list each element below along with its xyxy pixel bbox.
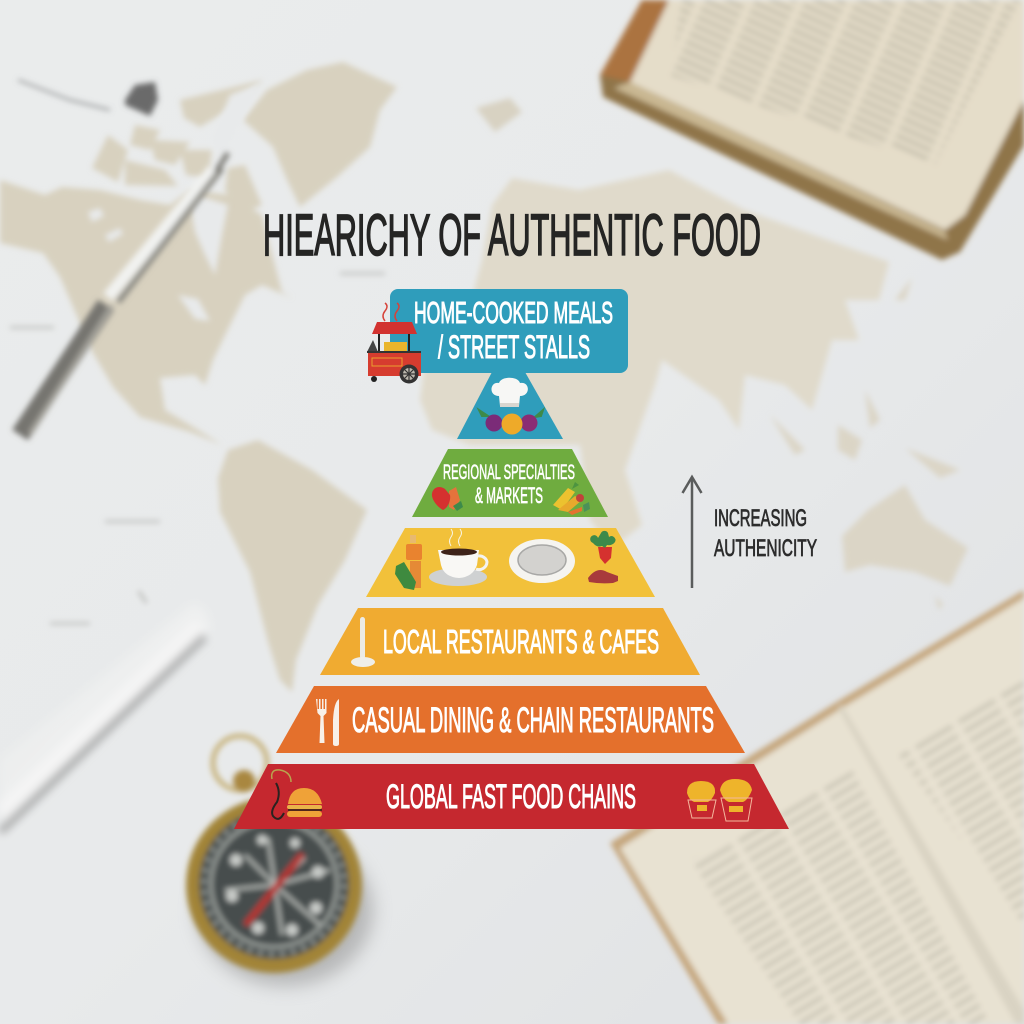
tier 3: yellow illustration band [366, 528, 655, 597]
icon: vegetables [479, 410, 543, 434]
pyramid [234, 289, 789, 829]
tier 2: regional specialties: & MARKETS [475, 483, 543, 508]
icon: fruit [432, 487, 463, 511]
South America [218, 440, 367, 692]
Asian islands [770, 278, 960, 478]
icon: bottle and greens [395, 535, 422, 590]
icon: vegetable bundle [553, 482, 590, 515]
top tier banner [390, 289, 628, 373]
Greenland [243, 62, 397, 207]
Australia [842, 485, 968, 586]
Baffin island [225, 165, 262, 215]
icon: hook [272, 770, 291, 819]
tier 6: global fast food: GLOBAL FAST FOOD CHAINS [386, 778, 636, 816]
paper roll [0, 604, 210, 838]
Eurasia and Africa [420, 170, 889, 548]
world map [0, 62, 968, 692]
Arctic islands [180, 80, 263, 127]
arrow: increasing authenticity [682, 477, 702, 588]
icon: plate [509, 539, 575, 583]
label: increasing authenticity: INCREASING [714, 505, 807, 532]
tier 1: apex triangle [457, 372, 563, 439]
tier 2: regional specialties [412, 449, 608, 517]
tier 5: casual dining [276, 686, 745, 753]
pen [18, 80, 228, 435]
tier 5: casual dining: CASUAL DINING & CHAIN RESTAURANTS [352, 701, 714, 740]
map sea cut-outs and labels [10, 82, 500, 625]
icon: burger [287, 788, 322, 817]
tier 6: global fast food [234, 764, 789, 829]
icon: fries [687, 779, 752, 821]
book: bottom right [610, 590, 1024, 1024]
label: increasing authenticity [714, 505, 817, 562]
top tier banner: HOME-COOKED MEALS [414, 295, 613, 330]
tier 4: local restaurants [320, 608, 700, 675]
tier 2: regional specialties: REGIONAL SPECIALTIES [443, 461, 575, 484]
icon: street food cart [367, 303, 421, 384]
compass [186, 736, 373, 986]
top tier banner: / STREET STALLS [438, 329, 590, 365]
book: top right [600, 0, 1024, 260]
icon: chef hat [491, 378, 528, 407]
icon: utensil [351, 617, 375, 667]
label: increasing authenticity: AUTHENICITY [714, 535, 817, 562]
tier 4: local restaurants: LOCAL RESTAURANTS & CAFES [383, 623, 659, 660]
icon: fork and knife [316, 699, 339, 746]
icon: radish and meat [588, 531, 618, 583]
Europe fragment [476, 98, 522, 132]
North America [0, 180, 292, 445]
icon: coffee cup [429, 529, 487, 586]
